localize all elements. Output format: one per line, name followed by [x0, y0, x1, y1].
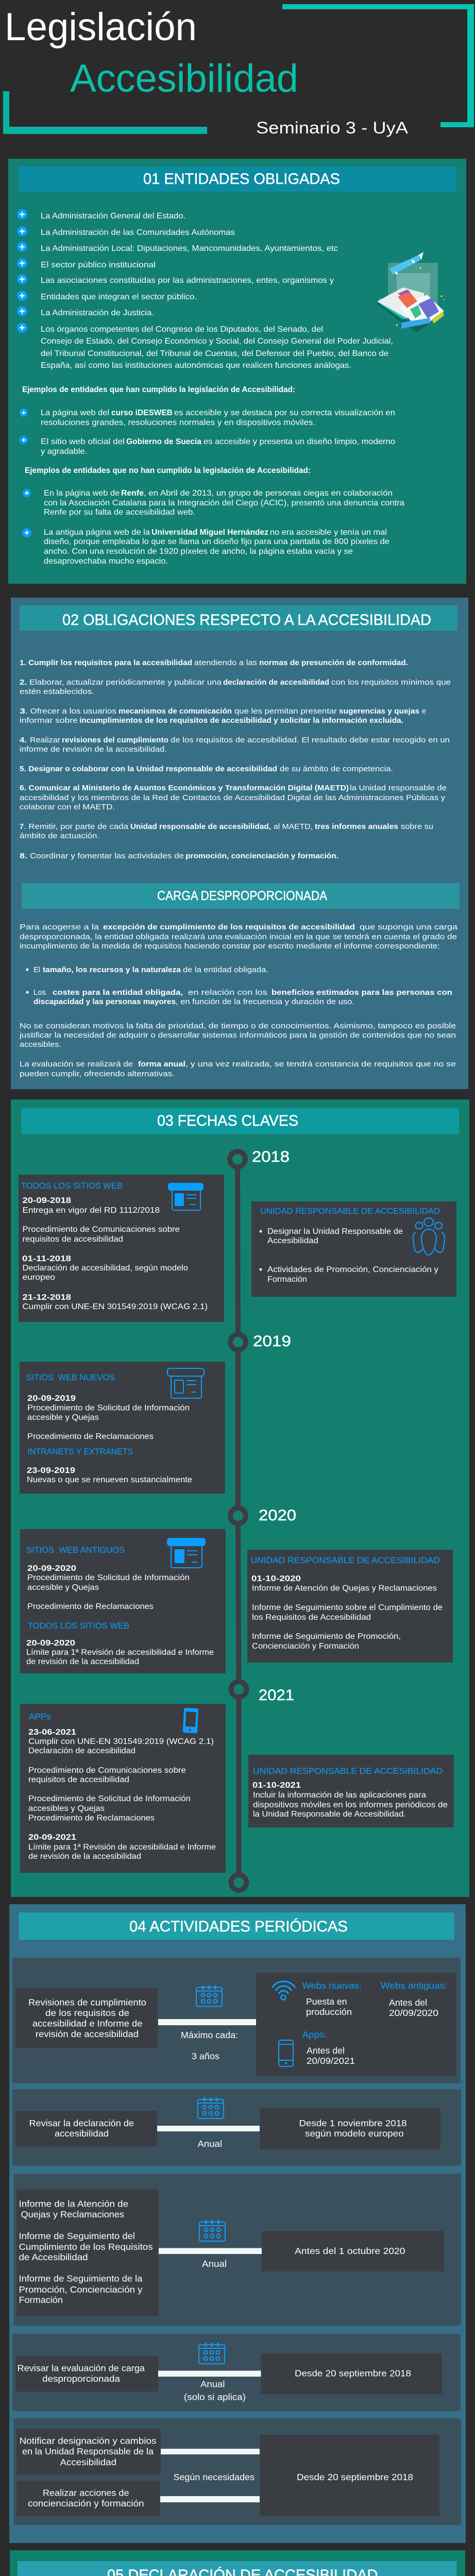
deadline box — [262, 2231, 444, 2272]
list of obliged entities: Consejo de Estado, del Consejo Económico y Social, del Consejo General del Poder Judicial, — [41, 337, 393, 346]
card: sitios web antiguos 2020: 20-09-2020 — [26, 1639, 75, 1648]
card: unidad responsable 2020: 01-10-2020 — [251, 1574, 301, 1583]
text block: carga desproporcionada: La evaluación se realizará de — [20, 1060, 133, 1069]
list of obliged entities: La Administración de Justicia. — [41, 309, 154, 317]
list of obliged entities: La Administración Local: Diputaciones, Mancomunidades, Ayuntamientos, etc — [41, 244, 338, 253]
deadline box: Desde 20 septiembre 2018 — [297, 2472, 413, 2482]
numbered obligations list: Unidad responsable de accesibilidad, — [130, 822, 271, 831]
text block: compliant examples: es accesible y se destaca por su correcta visualización en — [174, 409, 395, 417]
card: sitios web nuevos 2019: accesible y Quejas — [27, 1413, 99, 1422]
card: todos los sitios web 2018: 01-11-2018 — [22, 1255, 71, 1263]
card: todos los sitios web 2018: 20-09-2018 — [23, 1196, 71, 1205]
card: sitios web nuevos 2019: INTRANETS Y EXTRANETS — [28, 1447, 133, 1456]
numbered obligations list: 5. Designar o colaborar con la Unidad responsable de accesibilidad — [20, 765, 277, 773]
card: sitios web nuevos 2019: 23-09-2019 — [27, 1466, 75, 1475]
source box: Formación — [19, 2295, 63, 2305]
numbered obligations list: Elaborar, actualizar periódicamente y publicar una — [29, 678, 222, 687]
list of obliged entities: Entidades que integran el sector público. — [41, 293, 197, 301]
card: unidad responsable 2018: Formación — [267, 1275, 307, 1284]
year labels — [252, 1148, 296, 1704]
frequency label — [181, 2030, 238, 2061]
numbered obligations list: . Ofrecer a los usuarios — [25, 707, 116, 716]
card: sitios web antiguos 2020: accesible y Quejas — [27, 1583, 99, 1592]
numbered obligations list: normas de presunción de conformidad. — [259, 658, 408, 667]
numbered obligations list: incumplimientos de los requisitos de accesibilidad y solicitar la información excluida. — [79, 716, 403, 725]
icon: wifi — [273, 1981, 295, 2000]
text block: carga desproporcionada: incumplimiento de la medida de requisitos haciendo constar por escrito mediante el informe correspondiente: — [20, 942, 440, 951]
deadline box: Desde 1 noviembre 2018 — [299, 2118, 407, 2128]
numbered obligations list: de su ámbito de competencia. — [280, 765, 393, 773]
icon: calendar — [198, 2097, 224, 2119]
frequency label: Anual — [198, 2139, 222, 2149]
numbered obligations list: informe de revisión de la accesibilidad. — [20, 745, 167, 754]
panel: 02 obligaciones — [11, 598, 468, 1089]
text block: compliant examples: El sitio web oficial del — [41, 437, 125, 446]
deadline box: Desde 20 septiembre 2018 — [295, 2368, 411, 2378]
frequency label: Máximo cada: — [181, 2030, 238, 2040]
source box: desproporcionada — [42, 2374, 120, 2384]
text block: carga desproporcionada: discapacidad y las personas mayores — [33, 997, 176, 1006]
subtitle: Seminario 3 - UyA — [256, 118, 409, 137]
card: sitios web nuevos 2019: Procedimiento de Solicitud de Información — [27, 1403, 190, 1413]
frequency label: Según necesidades — [173, 2472, 255, 2482]
deadline box: según modelo europeo — [305, 2128, 404, 2139]
source box: notificar: en la Unidad Responsable de la — [22, 2446, 154, 2456]
numbered obligations list — [20, 658, 451, 860]
text block: carga desproporcionada: justificar la necesidad de adquirir o desarrollar sistemas informáticos para la gestión de contenidos que no sean — [19, 1031, 456, 1040]
card: unidad responsable 2020: los Requisitos de Accesibilidad — [252, 1613, 371, 1622]
text block: non compliant examples: , en Abril de 2013, un grupo de personas ciegas en colaboración — [144, 489, 393, 498]
card: apps 2021: Límite para 1ª Revisión de accesibilidad e Informe — [28, 1843, 216, 1852]
text block: non compliant examples: diseño, porque empleaba lo que se llama un diseño fijo para una pantalla de 800 píxeles de — [44, 537, 389, 546]
card: sitios web antiguos 2020 — [20, 1529, 226, 1673]
source box: notificar — [16, 2429, 161, 2475]
numbered obligations list: con los requisitos mínimos que — [331, 678, 451, 687]
decorative frame top right — [282, 4, 474, 127]
source box: Cumplimiento de los Requisitos — [19, 2242, 153, 2252]
heading bar 01 — [19, 166, 456, 192]
card: apps 2021: Procedimiento de Solicitud de Información — [28, 1794, 191, 1803]
source box: Revisiones de cumplimiento — [28, 1997, 146, 2007]
arrow — [159, 2244, 273, 2259]
arrow — [161, 2444, 273, 2459]
card: unidad responsable 2018: Accesibilidad — [267, 1236, 318, 1245]
deadlines box — [256, 1973, 456, 2076]
text block: non compliant examples: En la página web de — [44, 489, 120, 498]
source box: realizar acciones: Realizar acciones de — [43, 2488, 129, 2498]
source box: Revisar la declaración de — [29, 2118, 134, 2128]
card: sitios web antiguos 2020: Procedimiento de Reclamaciones — [27, 1602, 154, 1611]
deadline box — [261, 2353, 442, 2394]
numbered obligations list: 8. — [20, 852, 27, 860]
card: unidad responsable 2020 — [247, 1550, 453, 1663]
activity row: informes — [13, 2174, 461, 2326]
numbered obligations list: 6. Comunicar al Ministerio de Asuntos Económicos y Transformación Digital (MAETD) — [20, 784, 349, 792]
card: apps 2021: Procedimiento de Comunicaciones sobre — [28, 1766, 186, 1775]
card: todos los sitios web 2018: Procedimiento de Comunicaciones sobre — [23, 1225, 180, 1234]
card: apps 2021: Procedimiento de Reclamaciones — [28, 1814, 155, 1823]
icon: browser filled — [167, 1538, 206, 1568]
text block: compliant examples — [20, 385, 395, 456]
numbered obligations list: Realizar — [30, 736, 60, 744]
heading bar 02 — [20, 605, 457, 631]
text block: non compliant examples: Renfe — [121, 489, 144, 498]
card: unidad responsable 2021: Incluir la información de las aplicaciones para — [253, 1791, 426, 1800]
activity row: revisar declaracion — [12, 2089, 461, 2166]
card: todos los sitios web 2018: Declaración de accesibilidad, según modelo — [23, 1264, 188, 1273]
heading: non compliant examples: Ejemplos de entidades que no han cumplido la legislación de Accesibilidad: — [25, 466, 311, 475]
card: sitios web antiguos 2020: 20-09-2020 — [27, 1564, 76, 1573]
card: unidad responsable 2020: Informe de Atención de Quejas y Reclamaciones — [252, 1584, 437, 1593]
card: todos los sitios web 2018: Cumplir con UNE-EN 301549:2019 (WCAG 2.1) — [23, 1302, 208, 1311]
deadlines box: 20/09/2020 — [389, 2008, 438, 2018]
decorative frame bottom left — [3, 91, 207, 134]
card: sitios web nuevos 2019 — [20, 1362, 225, 1494]
text block: carga desproporcionada — [19, 923, 458, 1078]
source box — [15, 1988, 158, 2048]
text block: non compliant examples: La antigua página web de la — [44, 528, 150, 537]
numbered obligations list: Coordinar y fomentar las actividades de — [30, 852, 184, 860]
deadline box — [260, 2108, 440, 2149]
arrow — [158, 2015, 267, 2029]
deadlines box: Apps: — [302, 2029, 327, 2040]
card: unidad responsable 2021 — [248, 1755, 454, 1827]
numbered obligations list: ámbito de actuación. — [20, 832, 99, 840]
numbered obligations list: declaración de accesibilidad — [223, 678, 329, 687]
card: unidad responsable 2021: dispositivos móviles en los informes periódicos de — [253, 1801, 448, 1809]
list of obliged entities: del Tribunal Constitucional, del Tribunal de Cuentas, del Defensor del Pueblo, del Banco de — [41, 349, 388, 358]
numbered obligations list: 4. — [20, 736, 27, 744]
icon: calendar — [199, 2220, 225, 2241]
text block: carga desproporcionada: Para acogerse a la — [20, 923, 99, 931]
deadlines box: producción — [306, 2007, 352, 2017]
heading bar 01: 01 ENTIDADES OBLIGADAS — [143, 171, 340, 188]
card: apps 2021: accesibles y Quejas — [28, 1804, 105, 1813]
card: unidad responsable 2020: Informe de Seguimiento de Promoción, — [252, 1632, 401, 1641]
card: todos los sitios web 2018: requisitos de accesibilidad — [23, 1235, 123, 1244]
frequency label: Anual — [200, 2379, 225, 2389]
text block: carga desproporcionada: beneficios estimados para las personas con — [272, 988, 452, 997]
bullet — [23, 489, 31, 497]
card: unidad responsable 2020: Concienciación y Formación — [252, 1642, 359, 1651]
card: unidad responsable 2021: 01-10-2021 — [252, 1781, 301, 1790]
card: todos los sitios web 2018: TODOS LOS SITIOS WEB — [21, 1181, 123, 1191]
year labels: 2019 — [253, 1333, 291, 1350]
heading bar 03 — [21, 1108, 459, 1134]
numbered obligations list: e — [422, 707, 426, 716]
text block: carga desproporcionada: El — [33, 965, 40, 974]
card: apps 2021: Cumplir con UNE-EN 301549:2019 (WCAG 2.1) — [28, 1737, 214, 1746]
numbered obligations list: la Unidad responsable de — [350, 784, 447, 792]
text block: carga desproporcionada: , en función de la frecuencia y duración de uso. — [176, 997, 354, 1006]
heading bar: carga desproporcionada — [22, 883, 460, 909]
activity row: notificar y concienciar — [13, 2418, 461, 2525]
frequency label — [184, 2379, 246, 2402]
card: sitios web antiguos 2020: Límite para 1ª Revisión de accesibilidad e Informe — [26, 1648, 214, 1657]
card: apps 2021: requisitos de accesibilidad — [28, 1775, 129, 1784]
card: unidad responsable 2018 — [251, 1201, 456, 1297]
deadlines box: Antes del — [307, 2045, 345, 2056]
deadlines box: Webs nuevas: — [302, 1980, 362, 1991]
panel: 04 actividades periodicas — [9, 1904, 466, 2543]
list of obliged entities: La Administración General del Estado. — [41, 212, 185, 221]
deadlines box: Antes del — [389, 1997, 427, 2008]
numbered obligations list: colaborar con el MAETD. — [20, 803, 115, 811]
numbered obligations list: 2. — [20, 678, 27, 687]
card: sitios web nuevos 2019: Nuevas o que se renueven sustancialmente — [27, 1476, 192, 1484]
text block: compliant examples: es accesible y presenta un diseño limpio, moderno — [203, 437, 395, 446]
text block: carga desproporcionada: excepción de cumplimiento de los requisitos de accesibilidad — [103, 923, 355, 931]
card: apps 2021 — [20, 1704, 226, 1873]
card: unidad responsable 2018: UNIDAD RESPONSABLE DE ACCESIBILIDAD — [260, 1206, 440, 1216]
numbered obligations list: que les permitan presentar — [234, 707, 337, 716]
text block: carga desproporcionada: forma anual — [138, 1060, 185, 1069]
panel: 05 declaracion de accesibilidad — [10, 2550, 465, 2576]
activity row: revisiones de cumplimiento — [12, 1958, 461, 2083]
text block: carga desproporcionada: , y una vez realizada, se tendrá constancia de requisitos que no se — [185, 1060, 456, 1069]
list of obliged entities: Las asociaciones constituidas por las administraciones, entes, organismos y — [41, 276, 334, 285]
activity row: evaluacion de carga — [12, 2334, 461, 2411]
heading: compliant examples: Ejemplos de entidades que han cumplido la legislación de Accesibilidad: — [22, 385, 295, 394]
deadlines box: 20/09/2021 — [307, 2056, 355, 2066]
deadline box — [260, 2435, 439, 2516]
source box — [15, 2356, 158, 2392]
card: unidad responsable 2018: Actividades de Promoción, Concienciación y — [267, 1265, 438, 1274]
year labels: 2021 — [259, 1687, 294, 1704]
card: unidad responsable 2021: UNIDAD RESPONSABLE DE ACCESIBILIDAD — [253, 1766, 443, 1776]
year labels: 2020 — [259, 1507, 296, 1524]
source box: Informe de Seguimiento del — [19, 2231, 135, 2241]
text block: carga desproporcionada: en relación con los — [188, 988, 267, 997]
text block: non compliant examples: Renfe por su falta de accesibilidad web. — [44, 508, 195, 517]
title: Legislación: Legislación — [5, 5, 197, 49]
frequency label: (solo si aplica) — [184, 2392, 246, 2402]
card: apps 2021: Declaración de accesibilidad — [28, 1747, 135, 1755]
heading bar 05 — [18, 2561, 456, 2576]
bullet icons list — [17, 209, 27, 333]
text block: non compliant examples: Universidad Miguel Hernández — [151, 528, 268, 537]
text block: non compliant examples: no era accesible y tenía un mal — [270, 528, 387, 537]
bullet — [22, 528, 31, 537]
card: apps 2021: 23-06-2021 — [28, 1728, 76, 1737]
text block: non compliant examples: ancho. Con una resolución de 1920 píxeles de ancho, la página estaba vacía y se — [44, 547, 353, 556]
card: todos los sitios web 2018 — [19, 1175, 224, 1322]
text block: non compliant examples: con la Asociación Catalana para la Integración del Ciego (ACIC), presentó una denuncia contra — [44, 499, 404, 507]
list of obliged entities — [41, 212, 393, 370]
icon: people — [413, 1218, 445, 1255]
deadlines box: Puesta en — [306, 1996, 347, 2007]
numbered obligations list: promoción, concienciación y formación. — [185, 852, 338, 860]
source box — [15, 2111, 157, 2146]
panel: 03 fechas claves — [11, 1099, 469, 1897]
card: apps 2021: de revisión de la accesibilidad — [28, 1852, 141, 1861]
card: sitios web antiguos 2020: de revisión de la accesibilidad — [26, 1657, 139, 1666]
numbered obligations list: sugerencias y quejas — [339, 707, 419, 716]
text block: carga desproporcionada: No se consideran motivos la falta de prioridad, de tiempo o de conocimientos. Asimismo, tampoco es posible — [20, 1022, 456, 1030]
source box: accesibilidad e Informe de — [32, 2019, 142, 2029]
card: unidad responsable 2021: la Unidad Responsable de Accesibilidad. — [253, 1810, 406, 1819]
heading bar 02: 02 OBLIGACIONES RESPECTO A LA ACCESIBILIDAD — [62, 612, 431, 629]
card: unidad responsable 2018: Designar la Unidad Responsable de — [267, 1227, 403, 1236]
text block: carga desproporcionada: de la entidad obligada. — [183, 965, 268, 974]
icon: calendar — [196, 1986, 222, 2006]
source box: revisión de accesibilidad — [36, 2029, 139, 2039]
text block: compliant examples: Gobierno de Suecia — [126, 437, 201, 446]
text block: carga desproporcionada: desproporcionada, la entidad obligada realizará una evaluación inicial en la que se tendrá en cuenta el grado de — [20, 933, 457, 941]
icon: phone filled — [183, 1708, 198, 1733]
numbered obligations list: accesibilidad y los miembros de la Red de Contactos de Accesibilidad Digital de las Administraciones Públicas y — [20, 793, 446, 802]
card: todos los sitios web 2018: europeo — [23, 1273, 55, 1282]
icon: phone outline — [279, 2040, 293, 2066]
bullet — [20, 409, 28, 417]
title: Accesibilidad: Accesibilidad — [70, 57, 298, 100]
card: apps 2021: APPs — [29, 1711, 51, 1722]
title block — [3, 4, 474, 137]
card: apps 2021: 20-09-2021 — [28, 1833, 76, 1842]
list of obliged entities: Los órganos competentes del Congreso de los Diputados, del Senado, del — [41, 325, 323, 334]
card: sitios web nuevos 2019: SITIOS WEB NUEVOS — [26, 1372, 115, 1382]
source box: notificar: Accesibilidad — [60, 2457, 116, 2467]
source box: Informe de Seguimiento de la — [19, 2273, 143, 2283]
list of obliged entities: La Administración de las Comunidades Autónomas — [41, 228, 235, 237]
icon: browser outline — [167, 1368, 204, 1398]
icon: open book with pencil — [377, 252, 445, 332]
heading bar: carga desproporcionada: CARGA DESPROPORCIONADA — [157, 889, 327, 903]
source box: notificar: Notificar designación y cambios — [20, 2436, 157, 2446]
numbered obligations list: de los requisitos de accesibilidad. El resultado debe estar recogido en un — [171, 736, 450, 744]
source box: Promoción, Concienciación y — [19, 2284, 143, 2295]
card: sitios web antiguos 2020: TODOS LOS SITIOS WEB — [28, 1621, 129, 1631]
icon: calendar — [199, 2343, 225, 2364]
arrow — [160, 2492, 273, 2506]
list of obliged entities: España, así como las instituciones autonómicas que realicen funciones análogas. — [41, 361, 351, 370]
card: unidad responsable 2020: Informe de Seguimiento sobre el Cumplimiento de — [252, 1603, 443, 1612]
numbered obligations list: 1. Cumplir los requisitos para la accesibilidad — [20, 658, 192, 667]
source box: realizar acciones — [16, 2481, 160, 2516]
bullet — [20, 436, 28, 444]
heading bar 04 — [19, 1912, 454, 1940]
numbered obligations list: tres informes anuales — [315, 822, 398, 831]
arrow — [158, 2367, 273, 2381]
numbered obligations list: al MAETD, — [274, 822, 313, 831]
numbered obligations list: sobre su — [401, 822, 433, 831]
text block: carga desproporcionada: accesibles. — [20, 1040, 61, 1049]
heading bar 03: 03 FECHAS CLAVES — [157, 1112, 298, 1129]
card: todos los sitios web 2018: Entrega en vigor del RD 1112/2018 — [23, 1206, 160, 1215]
card: sitios web nuevos 2019: 20-09-2019 — [27, 1394, 76, 1403]
text block: carga desproporcionada: que suponga una carga — [360, 923, 458, 931]
card: sitios web antiguos 2020: Procedimiento de Solicitud de Información — [27, 1573, 190, 1582]
arrow — [157, 2122, 271, 2136]
numbered obligations list: informar sobre — [20, 716, 78, 725]
source box: de los requisitos de — [45, 2008, 129, 2018]
numbered obligations list: estén establecidos. — [20, 687, 94, 696]
text block: compliant examples: y agradable. — [41, 447, 87, 456]
card: sitios web antiguos 2020: SITIOS WEB ANTIGUOS — [26, 1545, 125, 1555]
panel: 01 entidades obligadas — [8, 159, 466, 584]
source box: Quejas y Reclamaciones — [21, 2209, 124, 2219]
icon: browser filled — [168, 1183, 203, 1210]
frequency label: 3 años — [192, 2051, 219, 2061]
source box: de Accesibilidad — [19, 2252, 88, 2262]
numbered obligations list: mecanismos de comunicación — [118, 707, 232, 716]
deadlines box: Webs antiguas: — [381, 1980, 447, 1991]
text block: compliant examples: curso iDESWEB — [111, 409, 173, 417]
numbered obligations list: atendiendo a las — [194, 658, 257, 667]
text block: carga desproporcionada: costes para la entidad obligada, — [53, 988, 183, 997]
text block: non compliant examples — [22, 466, 404, 566]
list of obliged entities: El sector público institucional — [41, 261, 156, 269]
text block: compliant examples: resoluciones grandes, resoluciones normales y en dispositivos móviles. — [41, 418, 315, 427]
card: unidad responsable 2020: UNIDAD RESPONSABLE DE ACCESIBILIDAD — [250, 1555, 440, 1565]
source box: accesibilidad — [55, 2128, 109, 2139]
text block: non compliant examples: desaprovechaba mucho espacio. — [44, 557, 168, 566]
text block: carga desproporcionada: tamaño, los recursos y la naturaleza — [43, 965, 181, 974]
card: todos los sitios web 2018: 21-12-2018 — [23, 1293, 71, 1302]
source box — [16, 2190, 159, 2316]
source box: Informe de la Atención de — [19, 2199, 128, 2209]
frequency label: Anual — [202, 2259, 227, 2269]
source box: Revisar la evaluación de carga — [18, 2363, 145, 2373]
text block: compliant examples: La página web del — [41, 409, 109, 417]
deadline box: Antes del 1 octubre 2020 — [295, 2246, 405, 2256]
text block: carga desproporcionada: Los — [33, 988, 46, 997]
card: sitios web nuevos 2019: Procedimiento de Reclamaciones — [27, 1432, 154, 1441]
numbered obligations list: . Remitir, por parte de cada — [24, 822, 129, 831]
numbered obligations list: 7 — [20, 822, 24, 831]
timeline line with year markers — [230, 1151, 246, 1890]
numbered obligations list: 3 — [20, 707, 25, 716]
text block: carga desproporcionada: pueden cumplir, ofreciendo alternativas. — [20, 1070, 175, 1078]
source box: realizar acciones: concienciación y formación — [28, 2498, 144, 2509]
heading bar 04: 04 ACTIVIDADES PERIÓDICAS — [129, 1918, 348, 1935]
numbered obligations list: revisiones del cumplimiento — [62, 736, 168, 744]
year labels: 2018 — [252, 1148, 290, 1165]
